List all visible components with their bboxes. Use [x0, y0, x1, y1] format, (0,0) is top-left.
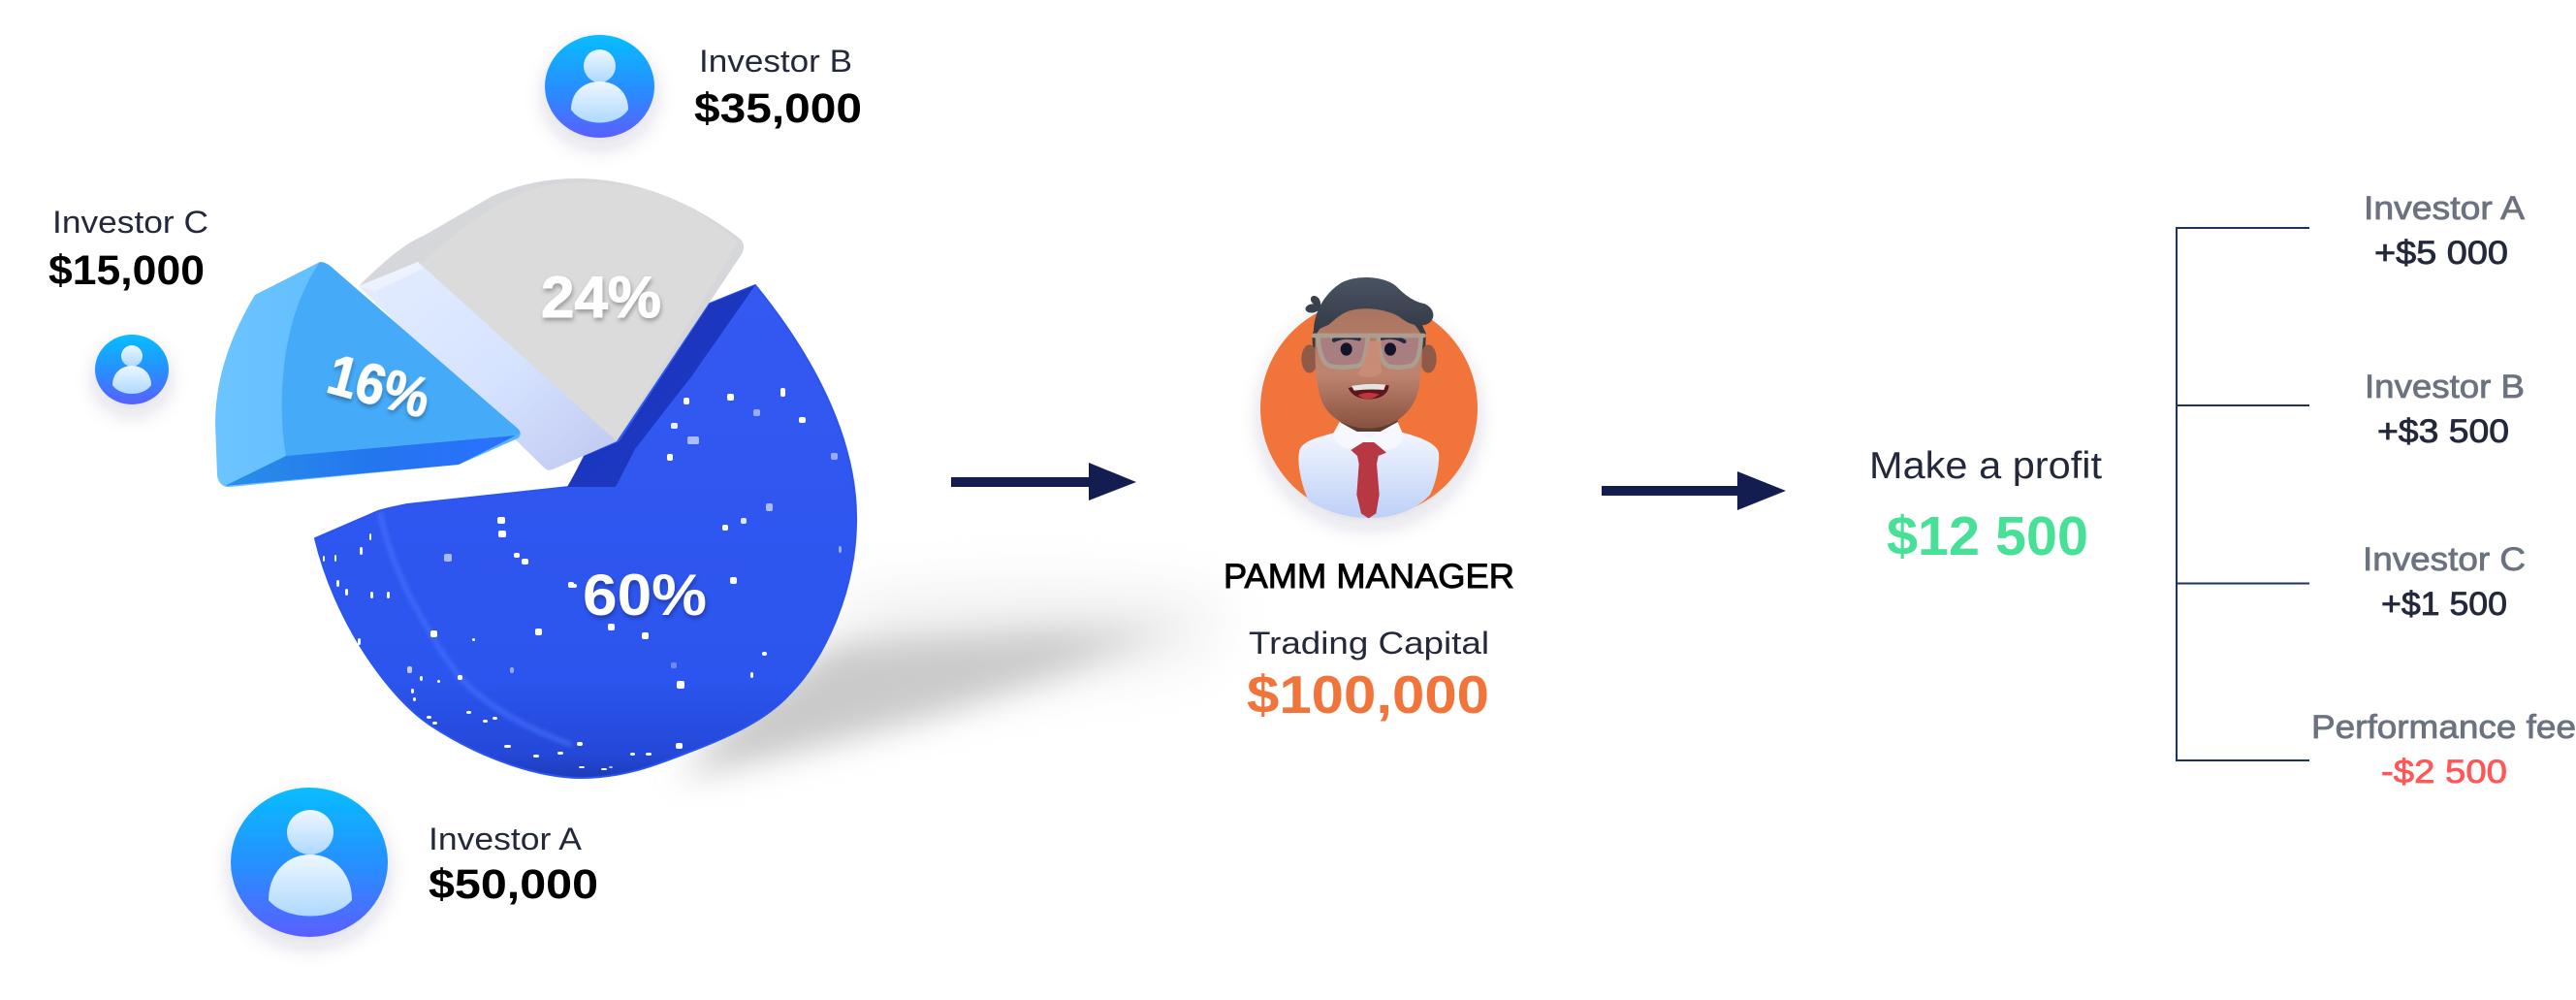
face	[1315, 308, 1422, 429]
row: performance fee	[2311, 709, 2576, 790]
profit amount: $12 500	[1887, 505, 2088, 567]
pie slice: 24% grey	[359, 178, 744, 470]
icon: investor B avatar	[545, 35, 654, 138]
profit summary	[1869, 445, 2102, 567]
hair	[1314, 277, 1433, 332]
investor C amount: $15,000	[48, 247, 205, 294]
pie slice: 60% blue	[315, 285, 856, 778]
neck	[1341, 414, 1398, 443]
hair tuft	[1305, 296, 1320, 313]
brows	[1334, 338, 1404, 341]
profit label: Make a profit	[1869, 445, 2102, 487]
investor A amount: $50,000	[429, 861, 598, 908]
pie slice: 16% light blue	[215, 262, 521, 487]
row: investor C	[2363, 541, 2526, 623]
arrow: manager to profit	[1602, 471, 1786, 510]
mouth	[1349, 385, 1389, 400]
arrow: pie to manager	[951, 463, 1136, 500]
row: performance fee: Performance fee	[2311, 709, 2576, 746]
row: performance fee: -$2 500	[2381, 754, 2507, 790]
row: investor B: Investor B	[2365, 369, 2525, 405]
ears	[1301, 344, 1318, 373]
label: 16%: 16%	[321, 342, 436, 431]
investor B	[545, 35, 862, 138]
eyes	[1341, 342, 1352, 356]
row: investor B: +$3 500	[2377, 413, 2509, 450]
label: 60%: 60%	[583, 563, 707, 628]
row: investor A	[2364, 190, 2525, 272]
icon: manager portrait	[1260, 277, 1478, 518]
PAMM manager	[1224, 277, 1514, 725]
investor B name: Investor B	[699, 44, 852, 79]
investor B amount: $35,000	[694, 85, 862, 132]
speckles	[323, 388, 842, 770]
glasses frame	[1314, 336, 1423, 368]
investor C name: Investor C	[52, 205, 208, 240]
row: investor C: Investor C	[2363, 541, 2526, 578]
pie chart shadow	[679, 588, 1231, 776]
icon: investor A avatar	[231, 788, 388, 937]
row: investor C: +$1 500	[2381, 586, 2507, 623]
collar	[1333, 422, 1403, 450]
row: investor B	[2365, 369, 2525, 450]
investor C	[48, 205, 208, 404]
lenses	[1318, 338, 1367, 368]
tie	[1351, 442, 1386, 518]
3D pie chart	[215, 178, 856, 778]
investor A	[231, 788, 598, 937]
trading capital amount: $100,000	[1247, 664, 1489, 725]
investor A name: Investor A	[429, 822, 583, 856]
back hair	[1312, 310, 1426, 366]
nose	[1358, 341, 1382, 377]
label: 24%: 24%	[541, 265, 661, 330]
distribution list	[2311, 190, 2576, 790]
shirt	[1298, 432, 1439, 518]
distribution bracket	[2177, 228, 2309, 760]
row: investor A: Investor A	[2364, 190, 2525, 227]
icon: investor C avatar	[95, 335, 169, 404]
trading capital label: Trading Capital	[1249, 626, 1489, 661]
row: investor A: +$5 000	[2374, 235, 2508, 272]
manager title: PAMM MANAGER	[1224, 558, 1514, 596]
